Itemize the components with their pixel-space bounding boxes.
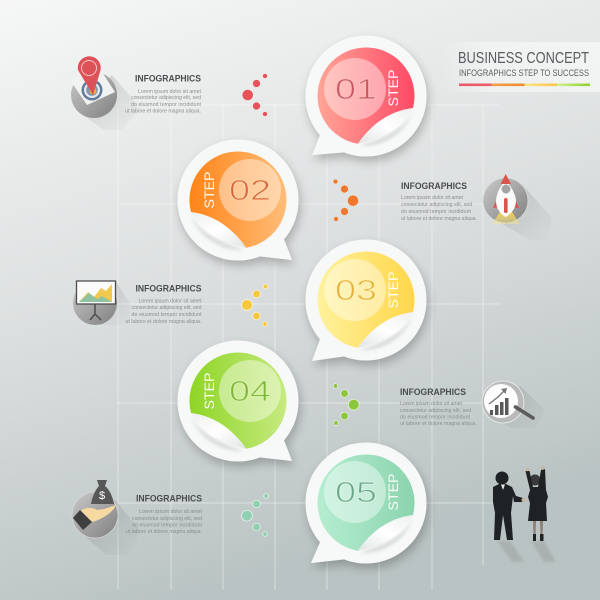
- step label: STEP: [385, 272, 401, 308]
- dots: step 03: [242, 284, 268, 326]
- text block: step 02: ut labore et dolore magna aliqua.: [401, 216, 477, 222]
- text block: step 03: ut labore et dolore magna aliqua.: [126, 319, 202, 325]
- dots: step 01: [242, 74, 267, 116]
- step 05 bubble: [305, 443, 426, 564]
- text block: step 02: [401, 181, 477, 222]
- text block: step 05: do eiusmod tempor incididunt: [132, 523, 203, 529]
- text block: step 04: ut labore et dolore magna aliqua.: [400, 421, 477, 427]
- step label: STEP: [385, 70, 401, 106]
- text block: step 02: INFOGRAPHICS: [401, 181, 468, 192]
- step label: STEP: [201, 372, 217, 410]
- text block: step 01: do eiusmod tempor incididunt: [131, 102, 202, 108]
- title block: [458, 50, 590, 86]
- number: 03: [335, 275, 377, 307]
- page curl: [358, 312, 413, 348]
- text block: step 05: consectetur adipiscing elit, sed: [132, 516, 202, 522]
- coloured disc: [189, 151, 286, 248]
- text block: step 04: [400, 387, 477, 427]
- number: 01: [335, 74, 377, 106]
- page curl: [358, 515, 413, 551]
- number circle: [219, 159, 281, 221]
- text block: step 01: [125, 74, 202, 115]
- text block: step 01: consectetur adipiscing elit, sed: [131, 95, 201, 101]
- bubble outline: [305, 36, 426, 157]
- text block: step 02: consectetur adipiscing elit, sed: [401, 202, 472, 208]
- text block: step 05: [126, 494, 203, 535]
- text block: step 01: Lorem ipsum dolor sit amet: [138, 89, 202, 95]
- businesswoman silhouette: [526, 466, 556, 562]
- page curl: [358, 108, 413, 144]
- coloured disc: [189, 352, 286, 449]
- text block: step 04: INFOGRAPHICS: [400, 387, 467, 398]
- text block: step 02: Lorem ipsum dolor sit amet: [401, 195, 464, 201]
- bubble outline: [305, 443, 426, 564]
- icon: money bag on hand: [72, 480, 140, 555]
- text block: step 01: INFOGRAPHICS: [135, 74, 202, 84]
- text block: step 04: consectetur adipiscing elit, sed: [400, 408, 471, 414]
- text block: step 05: INFOGRAPHICS: [136, 494, 203, 504]
- bubble outline: [178, 341, 299, 462]
- page curl: [191, 413, 246, 449]
- coloured disc: [318, 47, 415, 144]
- number circle: [324, 461, 386, 523]
- step 03 bubble: [305, 240, 426, 361]
- number circle: [219, 360, 281, 422]
- page curl shadow: [360, 314, 413, 350]
- number: 02: [229, 175, 271, 207]
- colour bar: [459, 84, 590, 86]
- bubble outline: [178, 140, 299, 261]
- step label: STEP: [201, 172, 217, 208]
- text block: step 04: do eiusmod tempor incididunt: [400, 415, 471, 421]
- text block: step 03: do eiusmod tempor incididunt: [132, 312, 202, 318]
- page curl shadow: [360, 110, 413, 146]
- text block: step 01: ut labore et dolore magna aliqua.: [125, 109, 201, 115]
- businessman silhouette: [493, 472, 526, 562]
- text block: step 03: [126, 284, 202, 325]
- number: 04: [229, 376, 271, 408]
- dollar sign: $: [99, 490, 105, 502]
- icon: presentation board: [73, 281, 130, 325]
- number circle: [324, 259, 386, 321]
- text block: step 04: Lorem ipsum dolor sit amet: [400, 401, 463, 407]
- step 04 bubble: [178, 341, 299, 462]
- number: 05: [335, 477, 377, 509]
- page curl shadow: [360, 517, 413, 553]
- text block: step 05: Lorem ipsum dolor sit amet: [139, 509, 203, 515]
- coloured disc: [318, 251, 415, 348]
- text block: step 03: Lorem ipsum dolor sit amet: [138, 299, 202, 305]
- text block: step 03: INFOGRAPHICS: [136, 284, 202, 294]
- dots: step 05: [242, 494, 268, 536]
- dots: step 04: [333, 384, 359, 425]
- icon: magnifier with chart: [482, 381, 545, 428]
- header band: [440, 42, 600, 92]
- text block: step 05: ut labore et dolore magna aliqua.: [126, 529, 202, 535]
- bubble outline: [305, 240, 426, 361]
- step 01 bubble: [305, 36, 426, 157]
- page curl shadow: [191, 214, 244, 250]
- page curl: [191, 212, 246, 248]
- icon: target and map pin: [70, 56, 140, 130]
- text block: step 03: consectetur adipiscing elit, sed: [132, 305, 202, 311]
- step 02 bubble: [178, 140, 299, 261]
- icon: rocket: [483, 174, 552, 240]
- text block: step 02: do eiusmod tempor incididunt: [401, 209, 472, 215]
- page curl shadow: [191, 415, 244, 451]
- dots: step 02: [333, 179, 358, 221]
- coloured disc: [318, 454, 415, 551]
- number circle: [324, 58, 386, 120]
- step label: STEP: [385, 474, 401, 510]
